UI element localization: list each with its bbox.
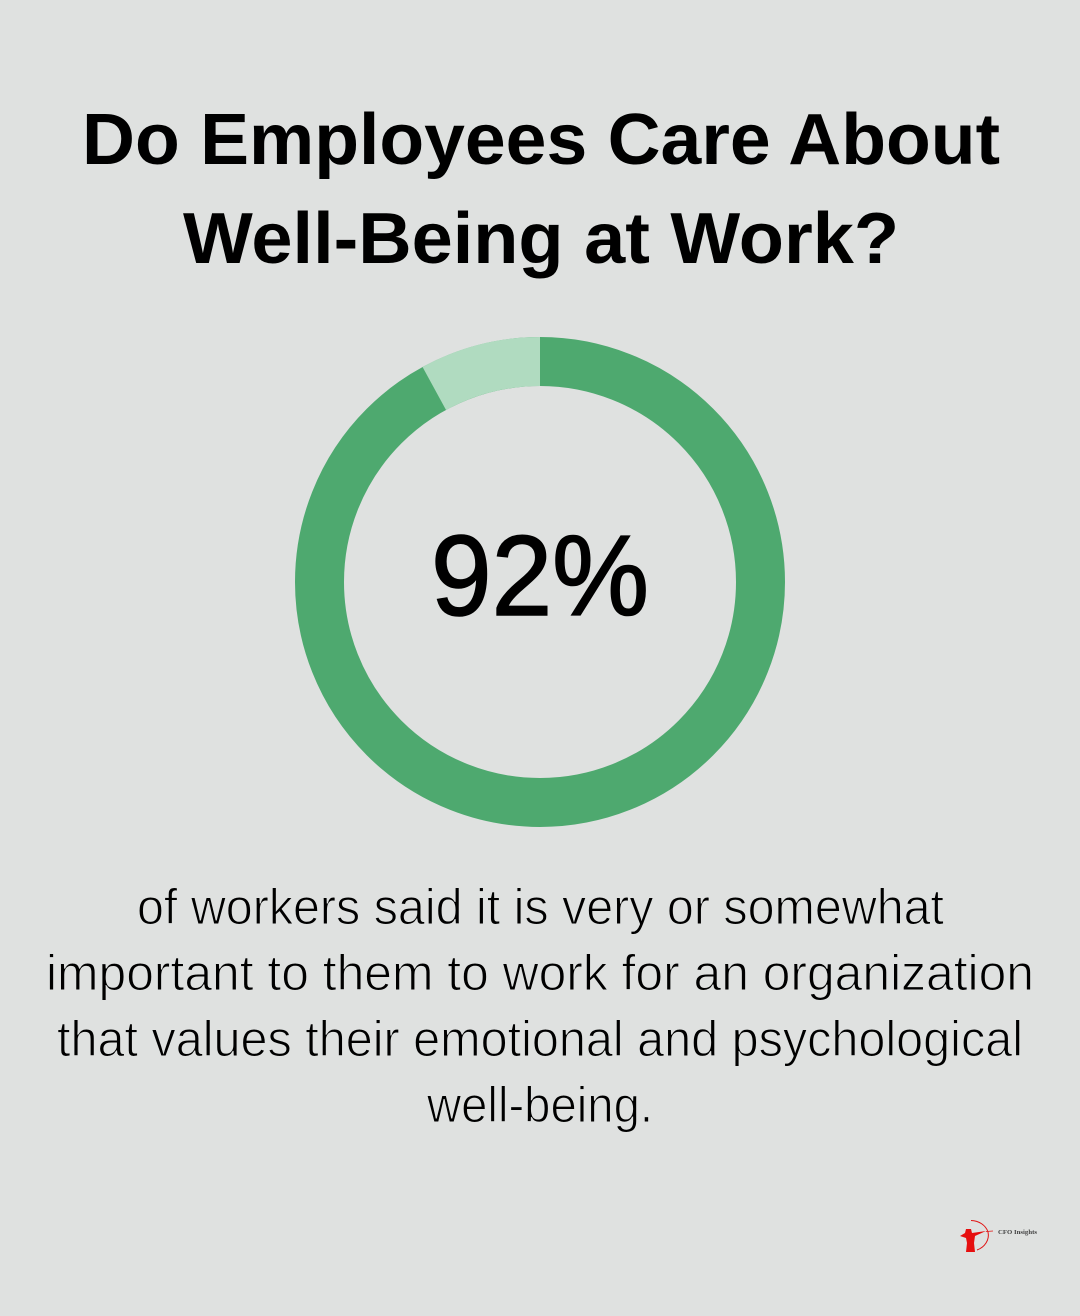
title: Do Employees Care About (82, 100, 1000, 180)
donut chart: 92% (320, 362, 760, 802)
title: Well-Being at Work? (183, 199, 899, 279)
logo: CFO Insights archer (960, 1220, 1038, 1252)
description text: well-being. (426, 1077, 653, 1133)
title (82, 100, 1000, 279)
description text: that values their emotional and psychological (57, 1011, 1023, 1067)
logo: CFO Insights archer: CFO Insights (998, 1230, 1038, 1236)
description text: important to them to work for an organization (46, 945, 1034, 1001)
value: 92%: 92% (431, 513, 649, 640)
description text: of workers said it is very or somewhat (137, 879, 944, 935)
description text (46, 879, 1034, 1133)
